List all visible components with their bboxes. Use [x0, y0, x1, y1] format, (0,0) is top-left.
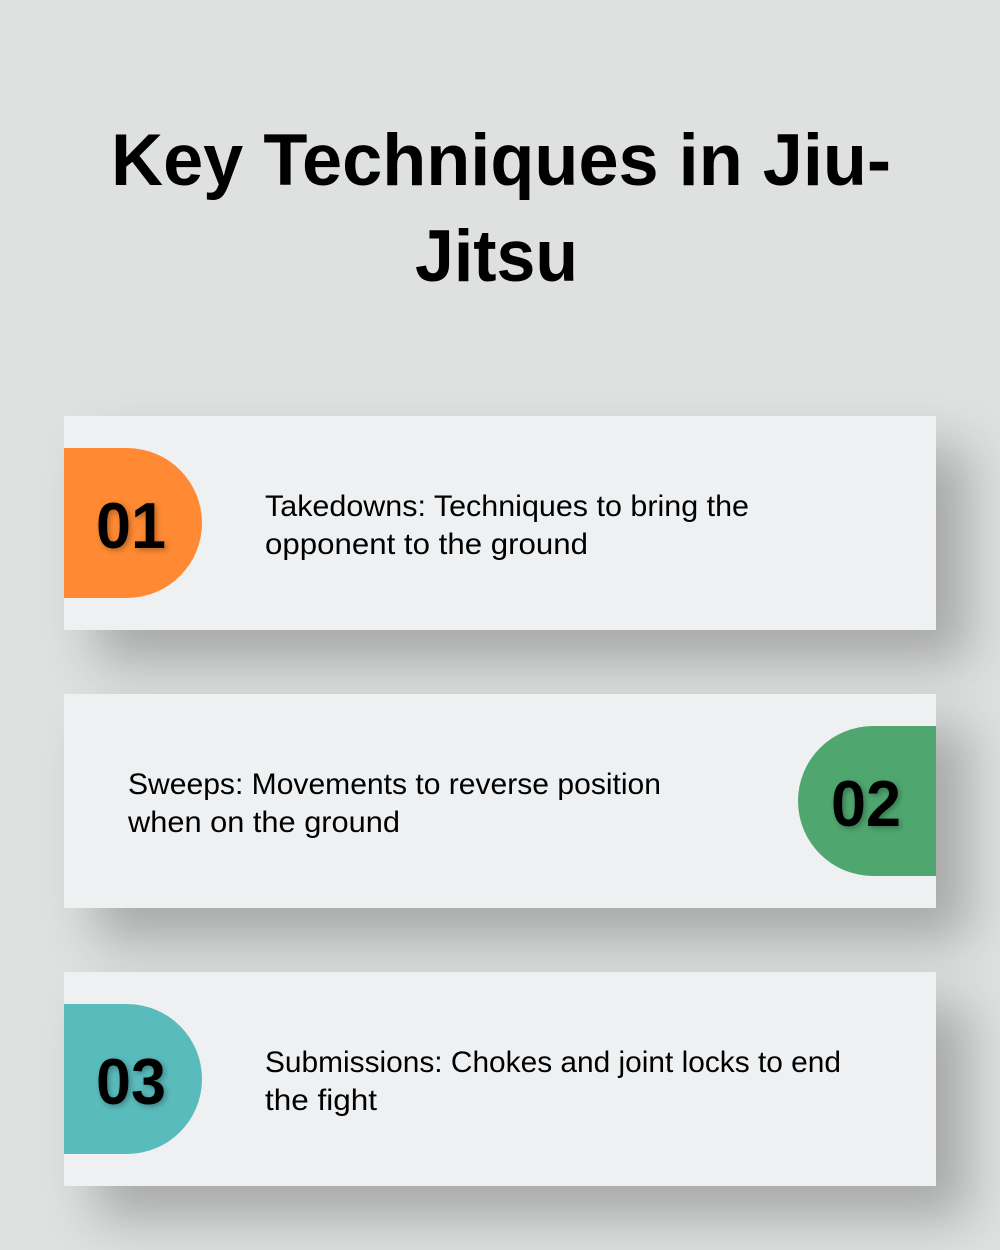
- badge: orange 01: [64, 448, 202, 598]
- panel: technique 03 submissions: [64, 972, 936, 1186]
- text: sweeps description: Sweeps: Movements to reverse position: [128, 768, 661, 801]
- text: sweeps description: [127, 768, 661, 839]
- badge: green 02: 02: [831, 767, 901, 840]
- title: [111, 120, 891, 297]
- badge: teal 03: [64, 1004, 202, 1154]
- panel: technique 01 takedowns: [64, 416, 936, 630]
- text: submissions description: [265, 1046, 841, 1117]
- panel: technique 02 sweeps: [64, 694, 936, 908]
- text: submissions description: Submissions: Chokes and joint locks to end: [265, 1046, 841, 1079]
- text: sweeps description: when on the ground: [127, 806, 400, 839]
- text: takedowns description: opponent to the ground: [265, 528, 588, 561]
- text: takedowns description: Takedowns: Techniques to bring the: [265, 490, 749, 523]
- badge: orange 01: 01: [96, 489, 166, 562]
- text: takedowns description: [265, 490, 749, 561]
- badge: green 02: [798, 726, 936, 876]
- badge: teal 03: 03: [96, 1045, 166, 1118]
- title: Jitsu: [415, 216, 578, 297]
- title: Key Techniques in Jiu-: [111, 120, 891, 201]
- text: submissions description: the fight: [265, 1084, 378, 1117]
